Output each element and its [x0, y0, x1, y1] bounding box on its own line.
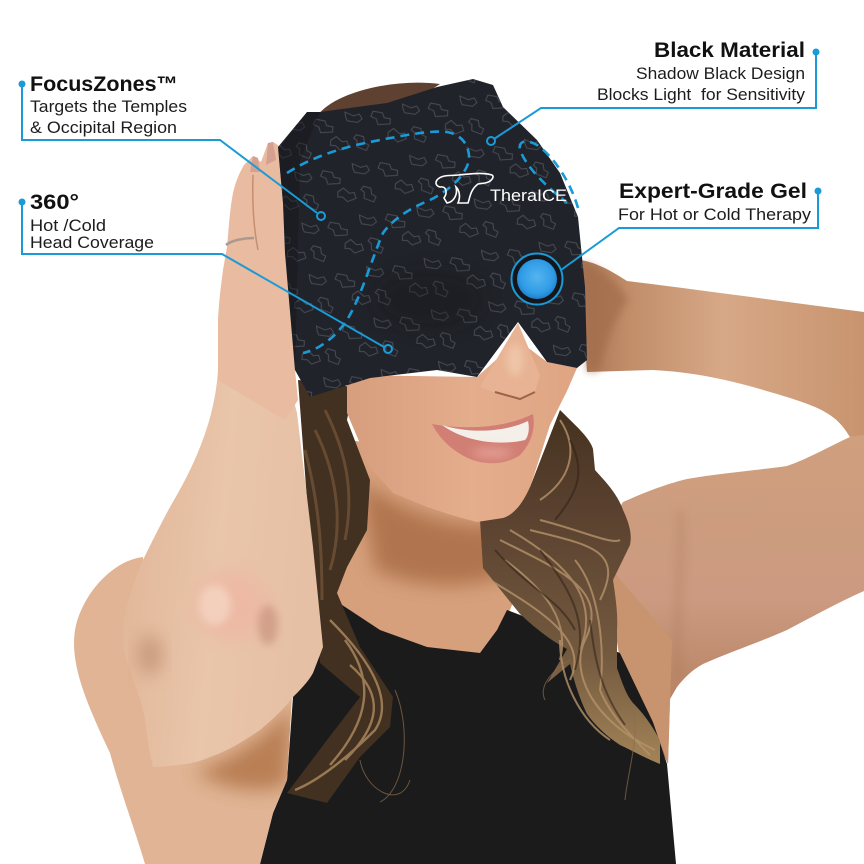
left forearm and elbow [122, 360, 323, 767]
callout: Black Material: Black Material [654, 39, 805, 62]
right chest skin sliver [612, 570, 672, 764]
callout: 360 coverage [18, 191, 392, 353]
neck shadow under jaw [360, 480, 515, 585]
callout: Black Material: Shadow Black Design [636, 64, 805, 83]
neck and chest [330, 440, 530, 656]
torso shadow under elbow [195, 705, 293, 790]
right forearm [580, 260, 864, 437]
dashed zone: occipital [520, 141, 578, 208]
callout: FocusZones: & Occipital Region [30, 118, 177, 137]
callout: FocusZones: FocusZones™ [30, 73, 178, 96]
tank top [260, 597, 676, 864]
right hand knuckle shading [583, 262, 628, 372]
mouth [432, 414, 534, 463]
dashed zone: temple [287, 132, 469, 353]
face [347, 340, 577, 522]
logo: bear and wordmark: TheraICE [490, 186, 567, 205]
the cap [278, 79, 587, 397]
callout: 360 coverage: 360° [30, 191, 79, 214]
armpit crease [677, 510, 681, 680]
gel window [512, 254, 562, 304]
nose highlight [507, 344, 523, 376]
elbow shading [138, 571, 278, 675]
ring [226, 238, 254, 245]
callout: Expert-Grade Gel [561, 180, 822, 270]
callout: FocusZones [18, 73, 325, 220]
hair: left side [287, 380, 410, 803]
logo: bear and wordmark [436, 173, 567, 205]
callout: FocusZones: Targets the Temples [30, 97, 187, 116]
callout: 360 coverage: Hot /Cold [30, 216, 106, 235]
nose [480, 323, 540, 399]
callout: Black Material: Blocks Light for Sensitivity [597, 85, 806, 104]
back hair top [318, 83, 440, 115]
left hand [218, 142, 298, 420]
flyaway strands [543, 660, 635, 800]
callout: Expert-Grade Gel: For Hot or Cold Therapy [618, 205, 812, 224]
callout: 360 coverage: Head Coverage [30, 233, 154, 252]
callout: Expert-Grade Gel: Expert-Grade Gel [619, 180, 807, 203]
hair: right side [480, 410, 660, 800]
left upper arm and torso [74, 557, 292, 864]
callout: Black Material [487, 39, 820, 145]
right upper arm [600, 435, 864, 764]
